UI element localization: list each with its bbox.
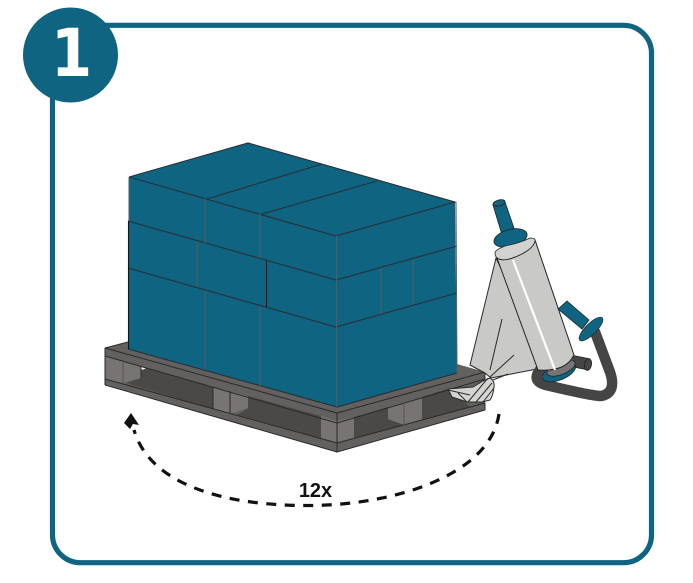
pallet [105,342,485,452]
handle stub [572,358,592,371]
box seams [128,143,457,407]
pallet silhouette [105,342,485,452]
label: rotation count: 12x [299,480,332,502]
film sheet [470,258,540,378]
stack fill [128,143,457,407]
step number badge: 1 [51,15,92,92]
side handle rod [558,301,589,329]
lower roll flange [540,356,578,386]
roll highlight [513,260,555,370]
film creases [490,319,514,380]
roll top edge [495,238,535,260]
step number badge [23,8,118,102]
dashed rotation arrow [124,413,499,506]
dark handle bar [537,332,612,396]
film knot [448,378,494,402]
panel: rounded frame [52,25,652,563]
top handle rod [493,202,515,238]
top flange [492,225,529,256]
white gap behind pallet [141,367,146,370]
pallet blocks [105,356,422,443]
stretch film tail [448,258,540,402]
side flange [576,314,606,344]
film roll body [497,240,574,370]
box verticals [129,177,457,407]
stretch film roll with handles [492,198,612,396]
pallet shadow gaps [126,367,470,438]
pallet outlines [105,342,485,452]
boxes stacked on pallet [128,143,457,407]
